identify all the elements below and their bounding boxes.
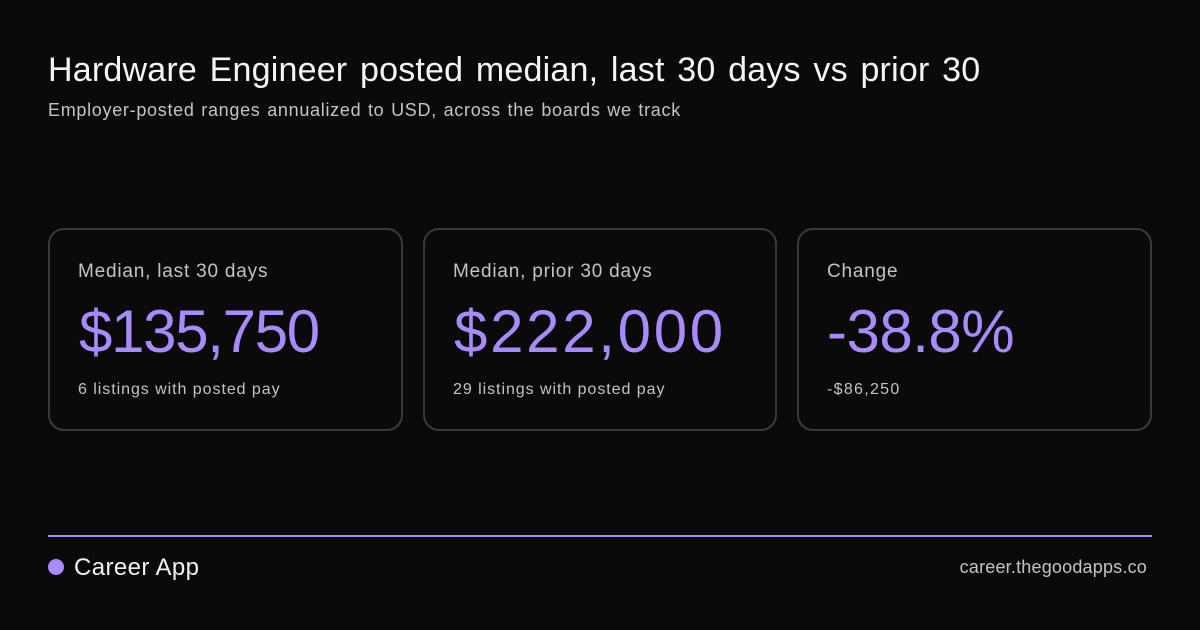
label: median last 30 days: Median, last 30 days <box>78 261 268 282</box>
note: 29 listings: 29 listings with posted pay <box>453 381 665 398</box>
value: 222,000: $222,000 <box>454 298 726 365</box>
panel: change <box>797 228 1152 431</box>
note: 6 listings: 6 listings with posted pay <box>78 381 281 398</box>
brand name: Career App <box>74 554 199 581</box>
footer url: career.thegoodapps.co <box>960 557 1147 577</box>
panel: median last 30 days <box>48 228 403 431</box>
note: dollar change: -$86,250 <box>827 381 901 398</box>
subtitle: Employer-posted ranges annualized to USD, across the boards we track <box>48 100 681 120</box>
label: median prior 30 days: Median, prior 30 days <box>453 261 653 282</box>
footer rule <box>48 535 1152 537</box>
icon: brand dot <box>48 559 64 575</box>
value: 135,750: $135,750 <box>79 298 319 365</box>
value: percent change: -38.8% <box>827 298 1014 365</box>
panel: median prior 30 days <box>423 228 777 431</box>
title: Hardware Engineer posted median, last 30 days vs prior 30 <box>48 51 980 89</box>
label: change: Change <box>827 261 898 282</box>
